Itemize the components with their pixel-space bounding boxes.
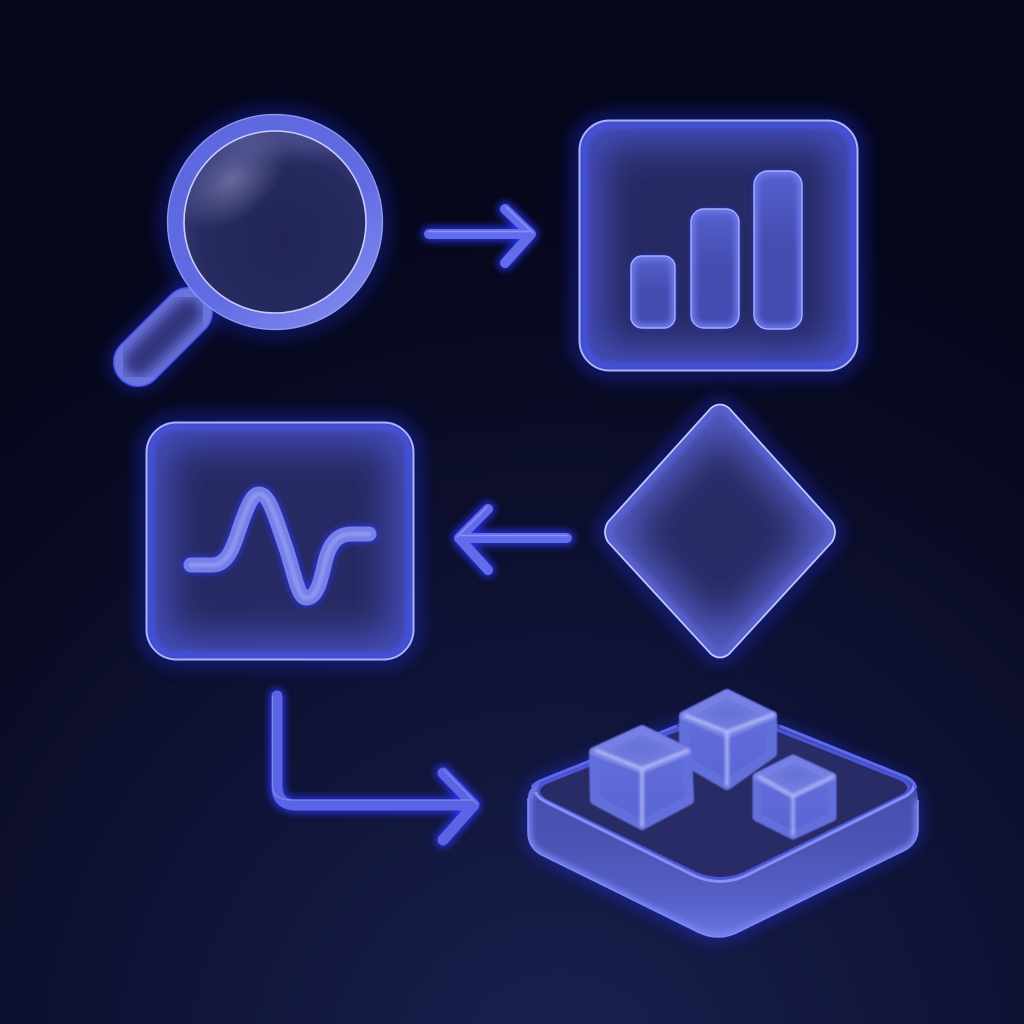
magnifier handle xyxy=(138,290,222,362)
cube: small right xyxy=(757,757,834,836)
panel glow xyxy=(579,120,858,371)
diamond glow xyxy=(605,404,835,658)
bar 3 xyxy=(754,171,802,329)
waveform panel glow xyxy=(146,422,414,660)
arrow: magnifier to bar chart xyxy=(429,207,533,263)
arrow: waveform to tray xyxy=(272,696,477,840)
cube: back xyxy=(684,693,775,786)
waveform panel body xyxy=(146,422,414,660)
tray inner floor xyxy=(538,710,909,878)
tray glow xyxy=(528,705,918,938)
tray base walls xyxy=(528,703,918,940)
magnifier glow xyxy=(138,114,383,362)
panel: waveform xyxy=(146,422,414,660)
waveform line xyxy=(191,494,369,598)
panel body xyxy=(579,120,858,371)
magnifier ring xyxy=(176,122,374,322)
tray with cubes xyxy=(528,693,918,940)
cube: left large xyxy=(594,727,689,827)
panel: bar chart xyxy=(579,120,858,371)
arrow: diamond to waveform xyxy=(457,507,567,570)
panel: diamond xyxy=(605,404,835,658)
diamond body xyxy=(605,404,835,658)
tray rim highlight xyxy=(536,784,914,882)
magnifier lens xyxy=(183,130,367,314)
bar 1 xyxy=(631,256,675,328)
bar 2 xyxy=(691,209,739,328)
icon: magnifying glass xyxy=(138,111,383,362)
